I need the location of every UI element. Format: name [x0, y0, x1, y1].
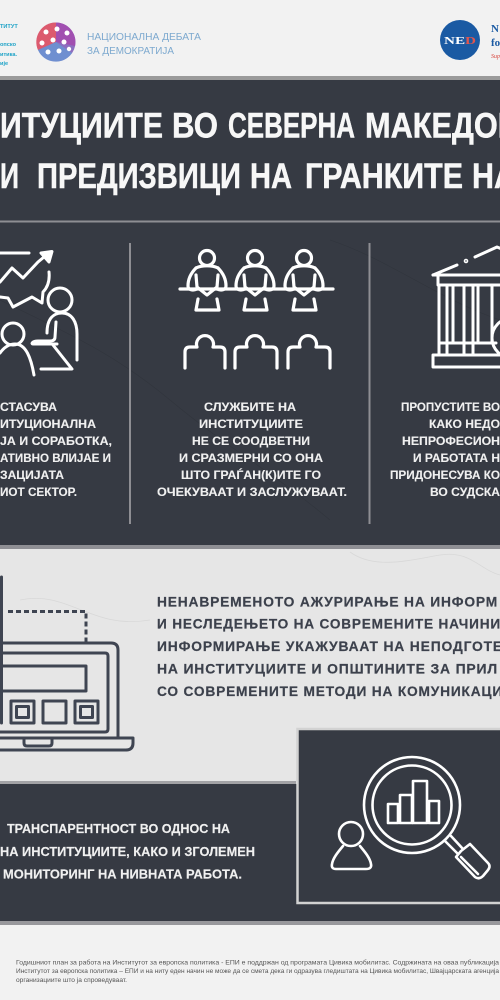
logo: Institute for European Policy: ије — [0, 61, 8, 67]
logo text: national debate — [87, 31, 201, 57]
text: information paragraph — [157, 594, 500, 699]
text: column 2: ИНСТИТУЦИИТЕ — [199, 417, 303, 431]
text: column 2: ОЧЕКУВААТ И ЗАСЛУЖУВААТ. — [157, 485, 347, 499]
text: column 3 — [390, 400, 500, 499]
text: transparency paragraph: МОНИТОРИНГ НА НИВНАТА РАБОТА. — [3, 866, 242, 882]
title — [0, 106, 500, 196]
header logos — [0, 20, 500, 67]
title: И — [0, 157, 19, 196]
text: column 1: СТАСУВА — [0, 400, 57, 414]
text: information paragraph: НЕНАВРЕМЕНОТО АЖУРИРАЊЕ НА ИНФОРМ — [157, 594, 498, 610]
logo: Institute for European Policy: опско — [0, 42, 17, 48]
text: column 3: И РАБОТАТА Н — [413, 451, 500, 465]
text: column 3: КАКО НЕДО — [429, 417, 500, 431]
text: column 2: СЛУЖБИТЕ НА — [204, 400, 296, 414]
text: column 1: ИТУЦИОНАЛНА — [0, 417, 96, 431]
text: column 1: ИОТ СЕКТОР. — [0, 485, 77, 499]
text: column 2: ШТО ГРАЃАН(К)ИТЕ ГО — [181, 467, 321, 482]
panel: monitoring icon box — [298, 729, 500, 903]
panel: institutions dark panel — [0, 80, 500, 549]
logo: Institute for European Policy: итика. — [0, 52, 18, 58]
text: information paragraph: СО СОВРЕМЕНИТЕ МЕТОДИ НА КОМУНИКАЦИ — [157, 684, 500, 699]
text: column 1: ЗАЦИЈАТА — [0, 468, 64, 482]
logo text: national debate: НАЦИОНАЛНА ДЕБАТА — [87, 31, 201, 43]
text: column 1: АТИВНО ВЛИЈАЕ И — [0, 451, 111, 465]
icon: magnifier with bar chart and person — [332, 757, 490, 878]
logo: national debate globe — [36, 22, 76, 62]
text: footer disclaimer: Институтот за европска политика – ЕПИ и на ниту еден начин не може да се смета дека ги одразува гледиштата на Цивика мобилитас, Швајцарската агенција — [16, 967, 499, 975]
text: transparency paragraph — [0, 821, 255, 882]
text: column 2 — [157, 400, 347, 499]
text: information paragraph: ИНФОРМИРАЊЕ УКАЖУВААТ НА НЕПОДГОТЕ — [157, 639, 500, 654]
panel: marble information section — [0, 549, 500, 782]
text: column 2: И СРАЗМЕРНИ СО ОНА — [179, 451, 323, 465]
logo: NED: NE D — [444, 35, 476, 47]
title: ВО — [172, 106, 218, 146]
title: ИТУЦИИТЕ — [0, 106, 163, 146]
text: information paragraph: НА ИНСТИТУЦИИТЕ И ОПШТИНИТЕ ЗА ПРИЛ — [157, 662, 498, 676]
title: НА — [250, 157, 292, 196]
icon: seated employees at table — [180, 250, 333, 368]
text: transparency paragraph: НА ИНСТИТУЦИИТЕ, КАКО И ЗГОЛЕМЕН — [0, 844, 255, 859]
text: footer disclaimer — [16, 958, 499, 984]
logo text: national debate: ЗА ДЕМОКРАТИЈА — [87, 45, 174, 57]
text: footer disclaimer: Годишниот план за работа на Институтот за европска политика - ЕПИ е поддржан од програмата Цивика мобилитас. Содржината на оваа публикација — [16, 958, 499, 966]
panel: transparency dark panel — [0, 781, 500, 925]
text: column 1: ЈА И СОРАБОТКА, — [0, 434, 112, 448]
text: column 3: ВО СУДСКА — [430, 485, 500, 499]
text: column 1 — [0, 400, 112, 499]
icon: courthouse with magnifier — [433, 247, 500, 367]
icon: laptop website — [0, 577, 133, 750]
text: column 3: НЕПРОФЕСИОН — [402, 434, 500, 448]
icon: presentation with chart — [0, 252, 77, 375]
text: information paragraph: И НЕСЛЕДЕЊЕТО НА СОВРЕМЕНИТЕ НАЧИНИ — [157, 616, 500, 632]
logo: Institute for European Policy: ТИТУТ — [0, 24, 18, 30]
text: transparency paragraph: ТРАНСПАРЕНТНОСТ ВО ОДНОС НА — [7, 821, 231, 836]
title: ГРАНКИТЕ — [305, 157, 463, 196]
text: column 2: НЕ СЕ СООДВЕТНИ — [192, 434, 310, 448]
logo: NED: N — [491, 23, 499, 35]
logo: NED — [440, 20, 500, 60]
text: footer disclaimer: организациите што ја спроведуваат. — [16, 977, 127, 984]
logo: Institute for European Policy — [0, 24, 18, 67]
title: СЕВЕРНА — [228, 106, 355, 146]
title: ПРЕДИЗВИЦИ — [37, 157, 241, 196]
logo: NED: Sup — [491, 54, 500, 60]
